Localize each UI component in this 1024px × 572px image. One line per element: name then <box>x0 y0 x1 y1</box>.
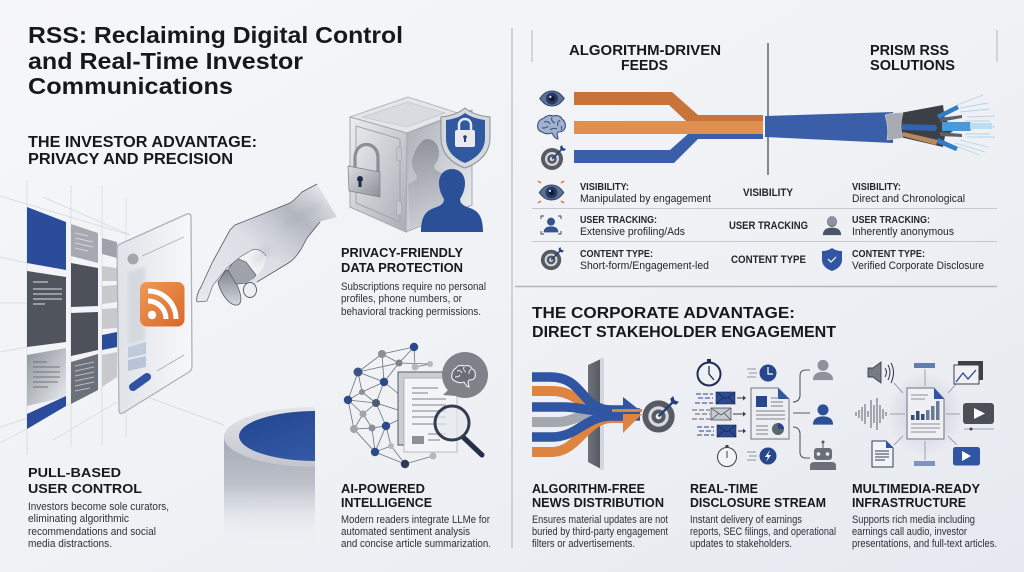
column heading: Prism RSS solutions: SOLUTIONS <box>870 57 955 74</box>
flow: tangled feeds merging <box>574 92 763 163</box>
stopwatch <box>698 359 720 386</box>
text block: algorithm-free news distribution: buried by third-party engagement <box>532 526 669 538</box>
column heading: algorithm-driven feeds <box>569 42 721 74</box>
speaker <box>868 362 894 383</box>
column heading: Prism RSS solutions: PRISM RSS <box>870 42 949 59</box>
lightning badge <box>747 448 776 464</box>
text block: multimedia-ready infrastructure: presentations, and full-text articles. <box>852 538 997 550</box>
second stopwatch <box>718 445 736 466</box>
text block: algorithm-free news distribution: filters or advertisements. <box>532 538 635 550</box>
row: user tracking: USER TRACKING <box>729 220 808 232</box>
row: visibility: VISIBILITY <box>743 187 794 199</box>
video player <box>963 403 994 430</box>
text block: AI-powered intelligence: automated sentiment analysis <box>341 526 470 538</box>
text block: pull-based user control: Investors become sole curators, <box>28 501 169 513</box>
panel: algorithm-driven vs Prism RSS comparison <box>532 30 997 175</box>
text block: pull-based user control: eliminating algorithmic <box>28 513 129 525</box>
icon: AI network with documents, magnifier and brain <box>344 343 488 468</box>
text block: real-time disclosure stream: Instant delivery of earnings <box>690 514 802 526</box>
waveform <box>856 398 886 430</box>
icon: algorithm-free distribution through wall to target <box>532 358 679 470</box>
icon: safe with lock, shield and person <box>348 97 490 232</box>
documents <box>398 372 457 452</box>
icon: real-time disclosure stream <box>692 359 836 470</box>
text block: AI-powered intelligence: Modern readers integrate LLMe for <box>341 514 490 526</box>
text block: AI-powered intelligence: and concise article summarization. <box>341 538 491 550</box>
clock badge <box>747 364 776 382</box>
magnifier <box>435 406 482 455</box>
title: and Real-Time Investor <box>28 48 303 74</box>
text block: pull-based user control: recommendations and social <box>28 526 156 538</box>
gray person silhouette <box>408 139 450 228</box>
row: content type: Short-form/Engagement-led <box>580 260 709 272</box>
text block: algorithm-free news distribution <box>532 481 669 550</box>
flow: fiber-optic cable <box>765 95 995 155</box>
row: user tracking: USER TRACKING: <box>852 215 930 226</box>
text block: multimedia-ready infrastructure: INFRASTRUCTURE <box>852 495 966 510</box>
row: visibility: Direct and Chronological <box>852 193 965 205</box>
cylinder <box>224 407 315 520</box>
row: visibility: VISIBILITY: <box>852 182 901 193</box>
fingers <box>218 270 241 305</box>
heading: the corporate advantage: DIRECT STAKEHOLDER ENGAGEMENT <box>532 324 836 341</box>
title: RSS: Reclaiming Digital Control <box>28 22 403 48</box>
heading: the investor advantage: THE INVESTOR ADVANTAGE: <box>28 134 257 151</box>
icon: multimedia-ready infrastructure <box>856 361 994 467</box>
text block: multimedia-ready infrastructure <box>852 481 997 550</box>
row: user tracking: Inherently anonymous <box>852 226 954 238</box>
heading: the investor advantage: PRIVACY AND PRECISION <box>28 151 233 168</box>
text block: algorithm-free news distribution: Ensures material updates are not <box>532 514 669 526</box>
row: visibility: Manipulated by engagement <box>580 193 711 205</box>
text block: pull-based user control <box>28 465 169 550</box>
padlock <box>348 144 380 197</box>
heading: the investor advantage <box>28 134 257 168</box>
speech bubble with brain <box>442 352 488 398</box>
row: visibility: VISIBILITY: <box>580 182 629 193</box>
small document <box>872 441 893 467</box>
text block: privacy-friendly data protection: profiles, phone numbers, or <box>341 293 462 305</box>
blue person <box>421 169 483 232</box>
feed panels column 3 <box>102 238 117 387</box>
text block: real-time disclosure stream <box>690 481 836 550</box>
text block: privacy-friendly data protection: PRIVACY-FRIENDLY <box>341 245 463 260</box>
hand pointing <box>197 184 337 305</box>
icon: RSS <box>140 282 184 326</box>
text block: real-time disclosure stream: reports, SEC filings, and operational <box>690 526 836 538</box>
palm and index <box>197 184 337 302</box>
arrows to recipients <box>793 370 810 458</box>
heading: the corporate advantage: THE CORPORATE ADVANTAGE: <box>532 305 795 322</box>
recipients <box>810 360 836 470</box>
column heading: algorithm-driven feeds: FEEDS <box>621 57 668 74</box>
document <box>751 388 789 439</box>
text block: AI-powered intelligence: INTELLIGENCE <box>341 495 432 510</box>
text block: multimedia-ready infrastructure: Supports rich media including <box>852 514 975 526</box>
title: Communications <box>28 73 233 99</box>
text block: pull-based user control: media distractions. <box>28 538 112 550</box>
glass tablet <box>117 214 192 414</box>
text block: privacy-friendly data protection <box>341 245 486 318</box>
comparison table <box>515 181 997 286</box>
column heading: algorithm-driven feeds: ALGORITHM-DRIVEN <box>569 42 721 59</box>
column heading: Prism RSS solutions <box>870 42 955 74</box>
text block: real-time disclosure stream: updates to stakeholders. <box>690 538 792 550</box>
text block: real-time disclosure stream: REAL-TIME <box>690 481 758 496</box>
row: user tracking: Extensive profiling/Ads <box>580 226 685 238</box>
text block: algorithm-free news distribution: NEWS DISTRIBUTION <box>532 495 664 510</box>
text block: multimedia-ready infrastructure: earnings call audio, investor <box>852 526 967 538</box>
text block: AI-powered intelligence <box>341 481 491 550</box>
envelopes <box>692 392 746 437</box>
row: user tracking <box>541 215 954 238</box>
row: visibility <box>538 181 965 205</box>
row: content type: CONTENT TYPE <box>731 254 806 266</box>
icon: brain <box>538 115 565 139</box>
text block: privacy-friendly data protection: DATA PROTECTION <box>341 260 463 275</box>
title <box>28 22 403 99</box>
document with chart <box>907 388 944 439</box>
row: content type: Verified Corporate Disclosure <box>852 260 984 272</box>
heading: the corporate advantage <box>532 305 836 341</box>
text block: AI-powered intelligence: AI-POWERED <box>341 481 425 496</box>
text block: privacy-friendly data protection: behavioral tracking permissions. <box>341 306 481 318</box>
text block: algorithm-free news distribution: ALGORITHM-FREE <box>532 481 645 496</box>
row: content type: CONTENT TYPE: <box>852 249 925 260</box>
illustration: feed panels, glass tablet and hand <box>0 180 337 520</box>
row: content type: CONTENT TYPE: <box>580 249 653 260</box>
icon: target <box>541 145 566 170</box>
text block: privacy-friendly data protection: Subscriptions require no personal <box>341 281 486 293</box>
feed panels column 2 <box>71 224 98 404</box>
row: content type <box>541 247 984 272</box>
shield <box>441 108 490 168</box>
text block: real-time disclosure stream: DISCLOSURE STREAM <box>690 495 826 510</box>
image card <box>954 361 983 384</box>
row: user tracking: USER TRACKING: <box>580 215 657 226</box>
text block: multimedia-ready infrastructure: MULTIMEDIA-READY <box>852 481 980 496</box>
blue video button <box>953 447 980 466</box>
text block: pull-based user control: USER CONTROL <box>28 481 142 496</box>
feed panels column 1 <box>27 207 66 429</box>
text block: pull-based user control: PULL-BASED <box>28 465 121 480</box>
icon: eye <box>540 91 564 106</box>
